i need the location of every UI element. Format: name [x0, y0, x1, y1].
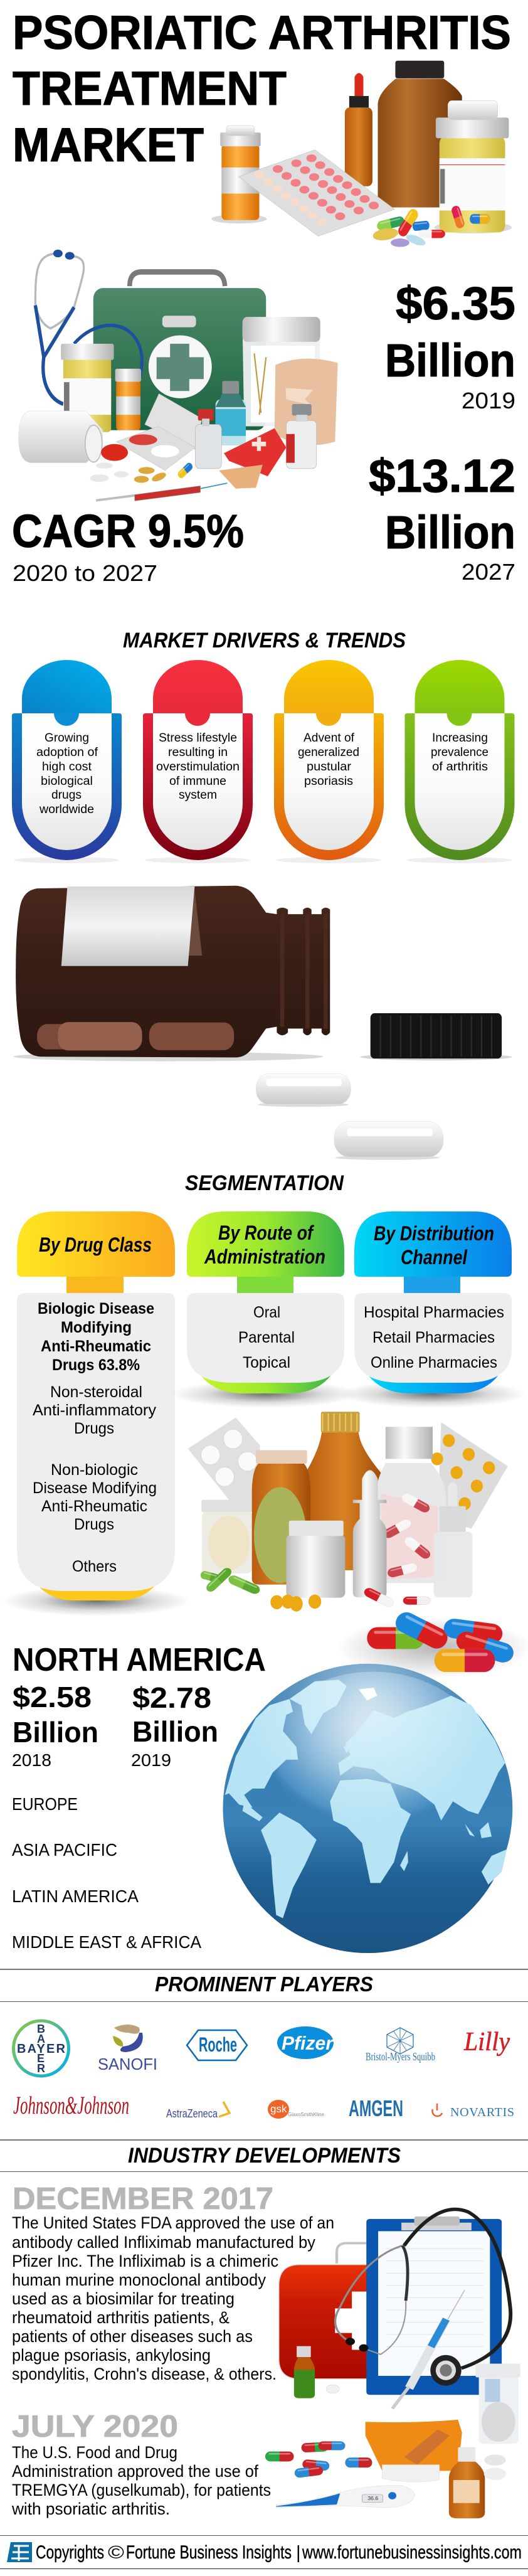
text: december 2017 development: plague psoriasis, ankylosing	[12, 2346, 211, 2365]
illustration: colourful capsules	[337, 1609, 528, 1678]
panel: driver 3: psoriasis	[304, 775, 353, 788]
text: december 2017 development: used as a biosimilar for treating	[12, 2289, 235, 2308]
stat: CAGR: CAGR 9.5%	[12, 505, 244, 557]
logo: Amgen: AMGEN	[349, 2095, 403, 2121]
panel: driver 3	[274, 660, 384, 863]
stat: 2019 market size: 2019	[462, 388, 515, 413]
illustration: first aid kit and stethoscope	[19, 250, 338, 501]
panel: by route of administration	[171, 1211, 359, 1408]
text: december 2017 development: rheumatoid arthritis patients, &	[12, 2308, 230, 2327]
panel: by drug class: Anti-Rheumatic	[41, 1338, 151, 1355]
panel: by distribution channel: Retail Pharmacies	[372, 1329, 495, 1346]
heading: prominent players: PROMINENT PLAYERS	[155, 1972, 373, 1996]
panel: by drug class: Disease Modifying	[33, 1479, 157, 1497]
panel: by drug class: Drugs 63.8%	[52, 1356, 140, 1374]
stat: 2019 market size: $6.35	[396, 277, 515, 329]
logo: Bayer: E	[37, 2052, 45, 2065]
icon: Fortune Business Insights logo	[7, 2542, 32, 2562]
text: july 2020 development: The U.S. Food and Drug	[12, 2443, 177, 2462]
text: other regions: LATIN AMERICA	[12, 1887, 139, 1906]
panel: by drug class: Others	[72, 1558, 117, 1575]
text: july 2020 development: Administration approved the use of	[12, 2462, 258, 2481]
text: north america: Billion	[13, 1716, 98, 1748]
text: north america: 2018	[12, 1750, 51, 1770]
panel: by distribution channel: Channel	[401, 1246, 468, 1269]
stat: 2019 market size	[385, 277, 515, 413]
panel: driver 4: prevalence	[431, 746, 488, 759]
panel: driver 2: Stress lifestyle	[159, 732, 237, 745]
panel: by distribution channel: Hospital Pharmacies	[364, 1304, 504, 1321]
text: december 2017 development: human murine monoclonal antibody	[12, 2270, 266, 2289]
panel: driver 1: Growing	[45, 732, 89, 745]
panel: driver 4: Increasing	[432, 732, 488, 745]
text: other regions	[12, 1794, 201, 1952]
panel: driver 2: system	[179, 789, 217, 802]
panel: by drug class: Drugs	[74, 1420, 114, 1437]
footer: Copyrights	[36, 2542, 104, 2563]
text: july 2020 development: TREMGYA (guselkumab), for patients	[12, 2481, 271, 2499]
text: north america: Billion	[132, 1715, 218, 1748]
illustration: red kit, clipboard and stethoscope: 36.6	[367, 2496, 379, 2501]
panel: driver 3: generalized	[298, 746, 359, 759]
logo: Roche: Roche	[199, 2033, 237, 2056]
title: TREATMENT	[13, 62, 287, 115]
panel: driver 2	[143, 660, 253, 863]
footer: ©	[108, 2543, 124, 2563]
logo: Bayer: B	[37, 2023, 45, 2035]
panel: by drug class: Anti-inflammatory	[33, 1402, 157, 1419]
panel: by route of administration: Oral	[253, 1304, 280, 1321]
panel: driver 2: resulting in	[168, 746, 228, 759]
panel: by drug class: By Drug Class	[39, 1233, 152, 1256]
panel: driver 1: high cost	[42, 760, 92, 774]
panel: by drug class: Anti-Rheumatic	[41, 1498, 147, 1515]
logo: Johnson & Johnson: Johnson&Johnson	[13, 2091, 129, 2119]
panel: driver 3: Advent of	[304, 732, 355, 745]
logo: Novartis	[432, 2104, 514, 2119]
panel: driver 4	[405, 660, 514, 863]
text: december 2017 development: DECEMBER 2017	[13, 2182, 273, 2216]
logo: Lilly: Lilly	[463, 2028, 510, 2057]
panel: driver 1: worldwide	[39, 803, 94, 816]
panel: by drug class: Biologic Disease	[38, 1300, 154, 1317]
panel: by route of administration: By Route of	[218, 1221, 315, 1244]
logo: GSK: GlaxoSmithKline	[288, 2112, 325, 2117]
panel: by distribution channel	[339, 1211, 527, 1408]
stat: 2027 market size: 2027	[462, 559, 515, 585]
footer	[0, 2535, 528, 2569]
text: july 2020 development: with psoriatic arthritis.	[11, 2499, 170, 2518]
stat: CAGR	[12, 505, 244, 586]
logo: Pfizer: Pfizer	[282, 2032, 334, 2054]
heading: segmentation: SEGMENTATION	[185, 1171, 344, 1195]
text: december 2017 development	[12, 2182, 334, 2383]
stat: 2027 market size	[369, 450, 515, 585]
illustration: assorted medicine bottles	[188, 1412, 508, 1612]
panel: by distribution channel: By Distribution	[374, 1222, 494, 1245]
footer: Fortune Business Insights	[126, 2542, 292, 2563]
panel: driver 1: biological	[41, 775, 93, 788]
logo: Sanofi: SANOFI	[98, 2055, 157, 2073]
text: december 2017 development: The United States FDA approved the use of an	[12, 2213, 334, 2232]
panel: driver 3: pustular	[307, 760, 352, 774]
logo: Bristol-Myers Squibb: Bristol-Myers Squibb	[366, 2050, 435, 2063]
logo: Bristol-Myers Squibb	[366, 2028, 435, 2063]
text: december 2017 development: antibody called Infliximab manufactured by	[12, 2233, 315, 2252]
panel: by distribution channel: Online Pharmacies	[371, 1354, 497, 1371]
logo: Bayer: A	[37, 2033, 45, 2045]
panel: driver 1: adoption of	[36, 746, 98, 759]
logo: AstraZeneca	[166, 2102, 230, 2120]
text: north america: NORTH AMERICA	[13, 1642, 266, 1678]
panel: driver 1: drugs	[51, 789, 82, 802]
text: december 2017 development: spondylitis, Crohn's disease, & others.	[12, 2365, 277, 2383]
panel: by drug class	[2, 1211, 190, 1616]
panel: driver 1	[12, 660, 122, 863]
panel: driver 4: of arthritis	[432, 760, 488, 774]
logo: Sanofi	[98, 2025, 157, 2073]
stat: 2027 market size: $13.12	[369, 450, 515, 502]
stat: CAGR: 2020 to 2027	[13, 560, 157, 586]
panel: by drug class: Drugs	[74, 1516, 114, 1533]
logo: Roche	[187, 2030, 247, 2060]
panel: by drug class: Non-steroidal	[50, 1383, 142, 1401]
text: july 2020 development	[11, 2410, 271, 2518]
logo: Novartis: NOVARTIS	[450, 2105, 514, 2119]
panel: by route of administration: Administration	[204, 1245, 325, 1268]
illustration: red kit, clipboard and stethoscope	[265, 2210, 520, 2518]
illustration: globe	[223, 1664, 512, 1953]
panel: by route of administration: Parental	[238, 1329, 295, 1346]
text: other regions: MIDDLE EAST & AFRICA	[12, 1932, 201, 1952]
stat: 2027 market size: Billion	[385, 506, 515, 558]
panel: by route of administration: Topical	[243, 1354, 290, 1371]
logo: Bayer: R	[37, 2062, 45, 2075]
illustration: medicine bottles and blister pack	[211, 61, 512, 248]
text: december 2017 development: Pfizer Inc. The Infliximab is a chimeric	[12, 2252, 278, 2270]
text: north america	[12, 1642, 266, 1770]
text: north america: $2.58	[13, 1681, 92, 1713]
text: north america: $2.78	[132, 1681, 211, 1714]
title: PSORIATIC ARTHRITIS	[13, 6, 511, 60]
text: july 2020 development: JULY 2020	[12, 2410, 178, 2444]
illustration: tipped brown bottle, cap and capsules	[13, 886, 512, 1160]
logo: AstraZeneca: AstraZeneca	[166, 2107, 218, 2120]
heading: market drivers: MARKET DRIVERS & TRENDS	[123, 629, 406, 652]
text: other regions: EUROPE	[12, 1794, 78, 1814]
text: december 2017 development: patients of other diseases such as	[12, 2327, 253, 2346]
title: MARKET	[13, 119, 204, 172]
logo: GSK	[268, 2100, 325, 2119]
text: other regions: ASIA PACIFIC	[12, 1840, 117, 1860]
stat: 2019 market size: Billion	[385, 334, 515, 386]
logo: GSK: gsk	[270, 2103, 287, 2115]
heading: industry developments: INDUSTRY DEVELOPMENTS	[128, 2144, 401, 2168]
logo: Bayer: BAYER	[17, 2042, 66, 2056]
text: north america: 2019	[131, 1750, 171, 1770]
logo: Bayer	[14, 2021, 69, 2076]
panel: by drug class: Modifying	[61, 1319, 132, 1336]
panel: by drug class: Non-biologic	[51, 1461, 138, 1479]
title	[13, 6, 511, 172]
footer: |	[296, 2543, 301, 2563]
panel: driver 2: overstimulation	[156, 760, 240, 774]
panel: driver 2: of immune	[169, 775, 226, 788]
logo: Pfizer	[277, 2026, 334, 2059]
